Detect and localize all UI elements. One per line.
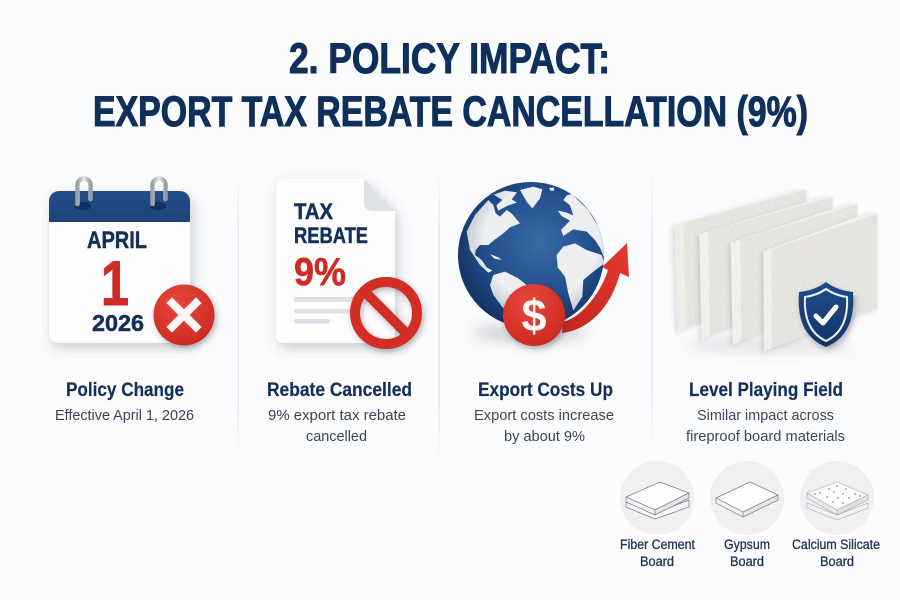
icon: tax rebate document: TAX [294, 199, 333, 224]
heading: export costs up: Export Costs Up [478, 380, 613, 401]
material: gypsum board: Gypsum [724, 537, 770, 552]
panel: level playing field [674, 189, 877, 445]
text: level playing field detail: fireproof board materials [686, 428, 845, 445]
text: level playing field detail [686, 407, 845, 445]
icon: tax rebate document: 9% [294, 251, 346, 294]
material: calcium silicate board: Board [820, 554, 854, 569]
material: calcium silicate board [792, 461, 880, 569]
text: rebate detail: cancelled [306, 428, 367, 445]
icon: shield check [799, 282, 853, 347]
text: export costs detail [474, 407, 614, 445]
panel: policy change [49, 179, 214, 424]
material: calcium silicate board: Calcium Silicate [792, 537, 880, 552]
heading: rebate cancelled: Rebate Cancelled [267, 380, 412, 401]
title: 2. POLICY IMPACT: [289, 35, 610, 83]
text: export costs detail: by about 9% [504, 428, 585, 445]
icon: red cross badge [154, 284, 214, 346]
material: fiber cement board [620, 461, 695, 569]
material: fiber cement board: Board [640, 554, 674, 569]
icon: prohibition sign [355, 282, 417, 344]
heading: policy change: Policy Change [66, 380, 184, 401]
material: fiber cement board: Fiber Cement [620, 537, 695, 552]
panel: export costs up [455, 180, 629, 445]
icon: calendar [49, 179, 214, 346]
title [93, 35, 808, 136]
text: policy change detail: Effective April 1, 2026 [55, 407, 194, 424]
text: rebate detail [268, 407, 406, 445]
icon: calendar: 1 [101, 249, 129, 319]
icon: calendar: 2026 [92, 310, 144, 336]
icon: globe with dollar and arrow [455, 180, 629, 346]
panel: rebate cancelled [267, 179, 417, 445]
text: rebate detail: 9% export tax rebate [268, 407, 406, 424]
material: gypsum board: Board [730, 554, 764, 569]
material: gypsum board [710, 461, 784, 569]
icon: dollar coin: $ [521, 290, 547, 341]
icon: fireproof boards with shield [674, 189, 877, 352]
icon: tax rebate document: REBATE [294, 223, 368, 248]
text: level playing field detail: Similar impact across [697, 407, 834, 424]
icon: calendar: APRIL [87, 227, 147, 254]
icon: dollar coin [503, 284, 565, 346]
text: export costs detail: Export costs increase [474, 407, 614, 424]
heading: level playing field: Level Playing Field [689, 380, 843, 401]
icon: tax rebate document [276, 179, 417, 344]
